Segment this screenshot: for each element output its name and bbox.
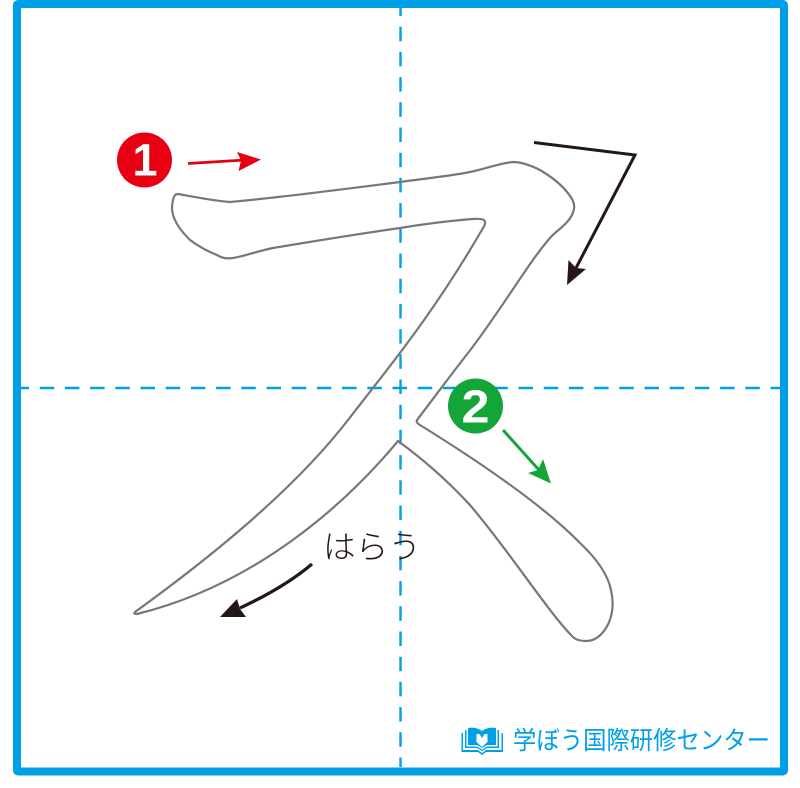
- label: はらう: はらう: [323, 529, 421, 565]
- step 1 number badge: 1: [132, 134, 158, 186]
- character outline: ス: [134, 162, 613, 641]
- step 2 arrow: green, pointing down-right: [503, 430, 551, 484]
- sweep arrow: black curved, pointing down-left: [220, 564, 312, 617]
- step 2 number badge: [448, 378, 503, 434]
- step 1 arrow: red, pointing right: [188, 152, 261, 171]
- step 1 number badge: [117, 132, 172, 188]
- logo text: 学ぼう国際研修センター: 学ぼう国際研修センター: [513, 727, 770, 755]
- step 2 number badge: 2: [462, 380, 490, 432]
- logo: book icon: [462, 728, 503, 755]
- stroke direction arrow: black, right then down-left: [534, 142, 635, 285]
